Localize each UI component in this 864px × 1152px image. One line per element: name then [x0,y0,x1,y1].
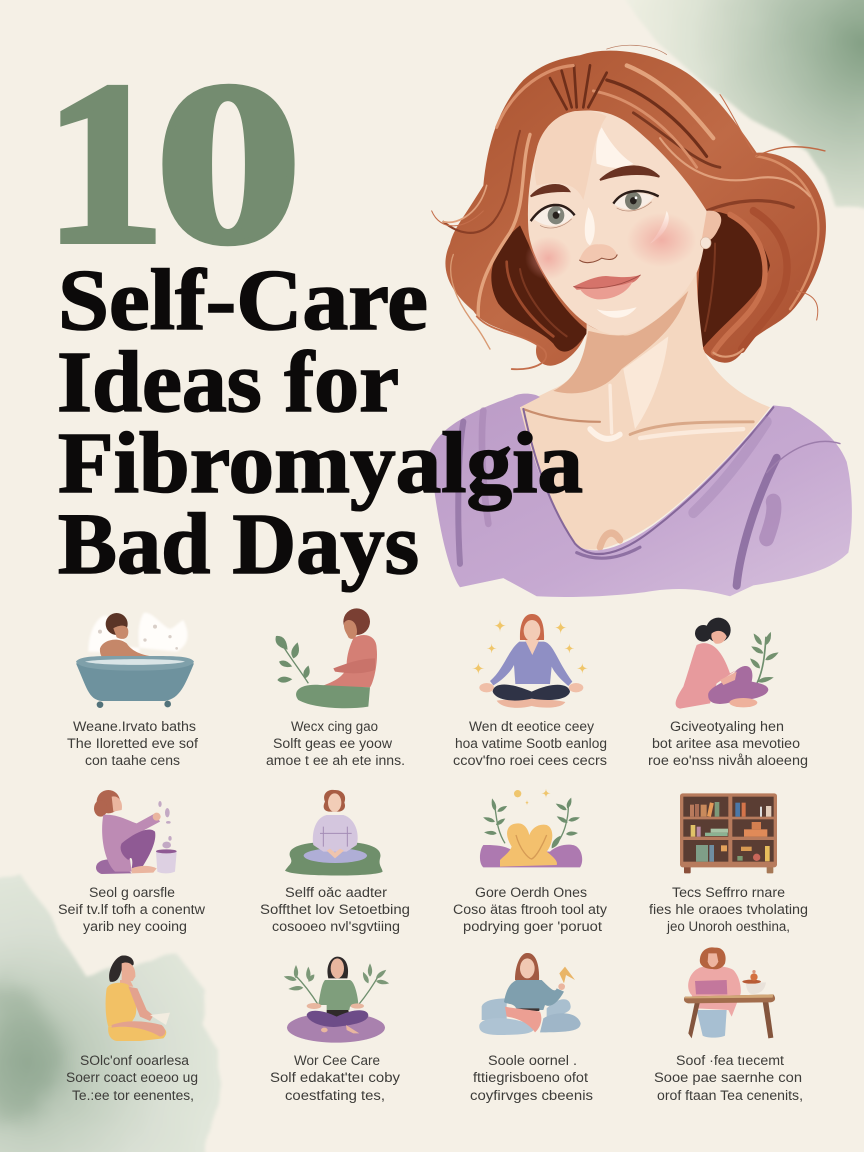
title: Ideas for [57,333,399,430]
icon: person at table with tea [684,947,775,1038]
caption: Gciveotyaling hen [670,719,784,734]
caption: Gore Oerdh Ones [475,885,587,900]
hair silhouette [445,51,826,366]
blush [525,236,572,280]
caption: bot aritee asa mevotieo [652,736,800,751]
dark hair shadow left [491,225,588,352]
tip 1: bath [67,613,198,768]
caption: yarib ney cooing [83,919,187,934]
tip 7: yellow blanket [453,789,607,934]
caption: Solf edakat'teı coby [270,1070,400,1085]
caption [266,719,405,768]
icon: bathtub [76,613,194,708]
number 10: 0 [155,35,302,292]
caption: jeo Unoroh oesthina, [666,919,790,934]
icon: woman with diffuser [94,790,177,874]
portrait of woman [430,45,852,597]
collarbone marks [523,385,753,547]
tip 12: tea table [654,947,803,1103]
caption: Selff oǎc aadter [285,885,388,900]
title: Fibromyalgia [58,414,583,511]
neck and chest [520,273,770,550]
shirt [430,394,852,597]
caption: ccov'fno roei cees cecrs [453,753,607,768]
caption [648,719,808,768]
caption [67,719,198,768]
eyebrows [531,166,659,196]
icon: person with leaves [273,608,377,708]
watercolor wash: bottom left [0,874,220,1152]
caption: The Iloretted eve sof [67,736,198,751]
tip 5: aromatherapy [58,790,205,934]
icon: woman on blue cushions [479,953,581,1035]
caption: Soffthet lov Setoetbing [260,902,410,917]
icon: blanket with laurel [480,789,582,867]
caption: roe eo'nss nivåh aloeeng [648,753,808,768]
nose [579,244,617,263]
lips [573,275,641,299]
caption: podrying goer 'poruot [463,919,602,934]
icon: meditating person with sparkles [472,614,588,708]
caption: hoa vatime Sootb eanlog [455,736,607,751]
caption: con taahe cens [85,753,180,768]
icon: meditation with branches [283,957,390,1043]
tip 11: cushions [470,953,593,1103]
caption: Soole oornel . [488,1053,577,1068]
caption: Seif tv.lf tofh a conentw [58,902,205,917]
title: Bad Days [58,495,419,592]
neck highlight [623,336,668,429]
neck shadow [553,291,688,393]
caption [453,719,607,768]
face highlights [585,127,669,318]
caption: fttiegrisboeno ofot [473,1070,588,1085]
left eye [531,205,575,228]
caption [470,1053,593,1103]
tip 4: seated with plant, pink [648,618,808,768]
watercolor wash: top right [618,0,864,212]
title [57,251,583,592]
tip 10: green top on purple mat [270,957,400,1103]
caption [58,885,205,934]
icon: woman reading in yellow [106,956,170,1041]
caption: fies hle oraoes tvholating [649,902,808,917]
caption: Te.:ee tor eenentes, [72,1088,194,1103]
caption: coestfating tes, [285,1088,385,1103]
dark hair shadow right [698,211,770,347]
caption: Weane.Irvato baths [73,719,196,734]
caption: SOlc'onf ooarlesa [80,1053,189,1068]
caption: Sooe pae saernhe con [654,1070,802,1085]
caption: Soerr coact eoeoo ug [66,1070,198,1085]
right eye [613,191,659,211]
ear and earring [700,211,721,249]
caption: Wen dt eeotice ceey [469,719,594,734]
caption: Solft geas ee yoow [273,736,392,751]
caption: Soof ·fea tıecemt [676,1053,784,1068]
tip 8: bookshelf [649,793,808,934]
caption: coyfirvges cbeenis [470,1088,593,1103]
forehead shading [535,111,607,200]
caption: Seol g oarsfle [89,885,175,900]
title: Self-Care [58,251,428,348]
face [528,110,707,335]
caption [66,1053,198,1103]
tip 6: cushion meditation [260,790,410,934]
caption: amoe t ee ah ete inns. [266,753,405,768]
shirt folds [458,407,840,585]
caption [453,885,607,934]
tip 3: meditation [453,614,607,768]
caption: Wor Cee Care [294,1053,380,1068]
caption [260,885,410,934]
caption: Coso ätas ftrooh tool aty [453,902,607,917]
caption: Tecs Seffrro rnare [672,885,785,900]
caption: orof ftaan Tea cenenits, [657,1088,803,1103]
tip 9: reading [66,956,198,1103]
icon: bookshelf [680,793,777,873]
tip 2: seated with plant [266,608,405,768]
caption: cosooeo nvl'sgvtiing [272,919,400,934]
icon: person on green cushion [285,790,383,876]
caption [654,1053,803,1103]
caption [270,1053,400,1103]
icon: woman in pink with plant [676,618,780,709]
number 10: 1 [44,35,165,292]
caption [649,885,808,934]
caption: Wecx cing gao [291,719,378,734]
hair strands [432,45,825,369]
